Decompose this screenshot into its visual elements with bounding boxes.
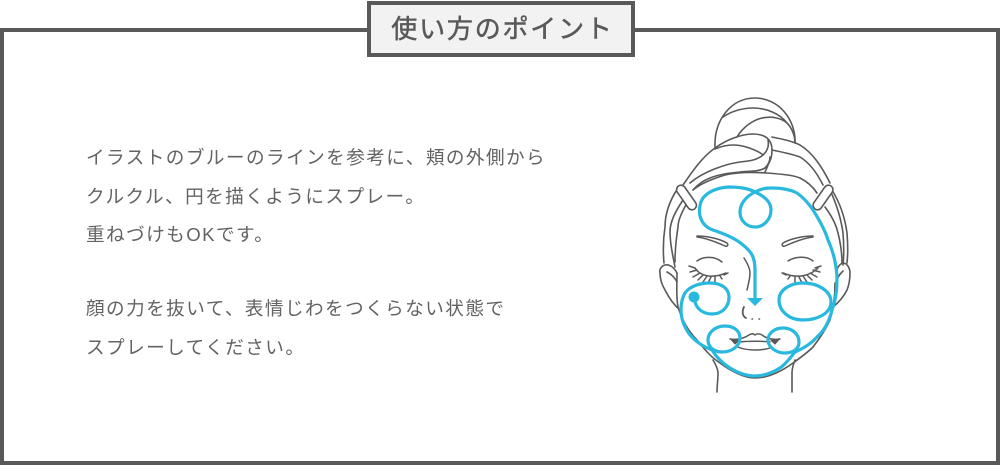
illustration: face with spray path <box>658 97 851 393</box>
icon: blue arrow head and start dot <box>688 292 763 306</box>
text block: instructions 2: スプレーしてください。 <box>86 336 305 358</box>
icon: blue spray path <box>681 187 837 376</box>
text block: instructions 2: 顔の力を抜いて、表情じわをつくらない状態で <box>86 298 505 319</box>
icon: eyes <box>689 257 821 283</box>
icon: face outline, ears and neck <box>660 263 850 392</box>
icon: blue cheek and mouth circles <box>708 283 831 353</box>
text block: instructions 2 <box>86 298 505 358</box>
title <box>367 1 635 57</box>
icon: hair and bun <box>663 98 848 267</box>
icon: nose and lips <box>730 258 780 350</box>
text block: instructions 1: 重ねづけもOKです。 <box>86 224 274 245</box>
title: 使い方のポイント <box>391 14 614 44</box>
icon: eyebrows <box>697 236 813 246</box>
icon: hair clips <box>675 183 835 212</box>
text block: instructions 1: クルクル、円を描くようにスプレー。 <box>86 186 425 206</box>
text block: instructions 1 <box>86 147 546 245</box>
text block: instructions 1: イラストのブルーのラインを参考に、頬の外側から <box>86 147 546 168</box>
